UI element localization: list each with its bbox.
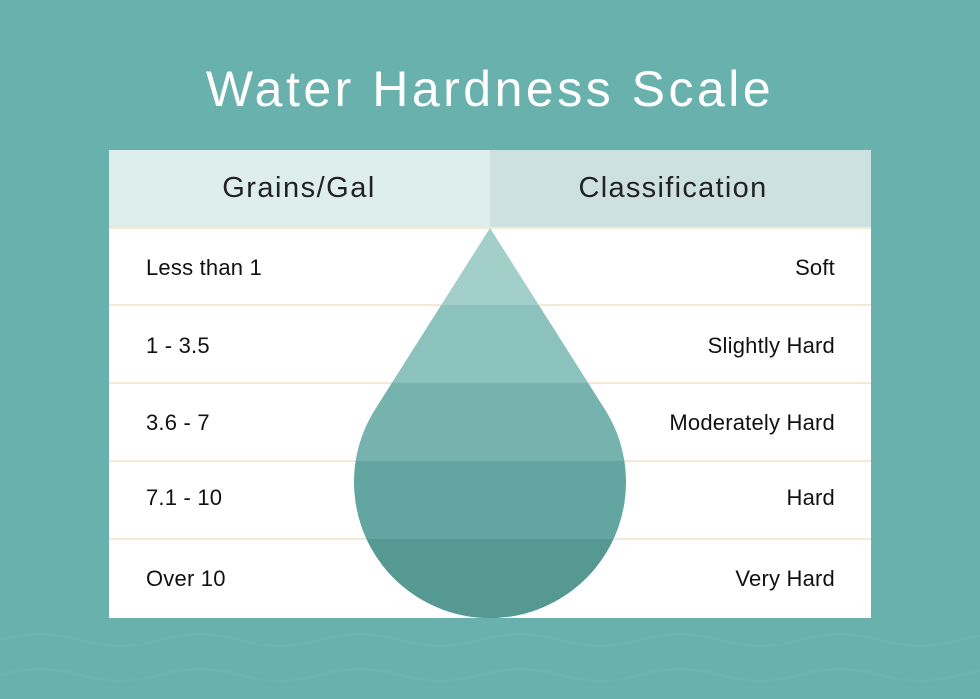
row labels: Hard bbox=[786, 485, 835, 510]
header: classification bbox=[490, 150, 871, 228]
table bbox=[109, 150, 871, 619]
row labels: 1 - 3.5 bbox=[146, 333, 210, 358]
row labels: Moderately Hard bbox=[669, 410, 835, 435]
row labels: Less than 1 bbox=[146, 255, 262, 280]
icon: water drop bbox=[340, 228, 640, 619]
header: classification: Classification bbox=[578, 172, 768, 204]
title: Water Hardness Scale bbox=[206, 61, 774, 117]
row labels: Over 10 bbox=[146, 566, 226, 591]
header: grains/gal bbox=[109, 150, 490, 228]
row labels: 7.1 - 10 bbox=[146, 485, 222, 510]
row labels: Very Hard bbox=[735, 566, 835, 591]
row labels: Soft bbox=[795, 255, 835, 280]
header: grains/gal: Grains/Gal bbox=[222, 172, 376, 204]
row labels: 3.6 - 7 bbox=[146, 410, 210, 435]
row labels bbox=[146, 255, 835, 591]
row labels: Slightly Hard bbox=[708, 333, 835, 358]
